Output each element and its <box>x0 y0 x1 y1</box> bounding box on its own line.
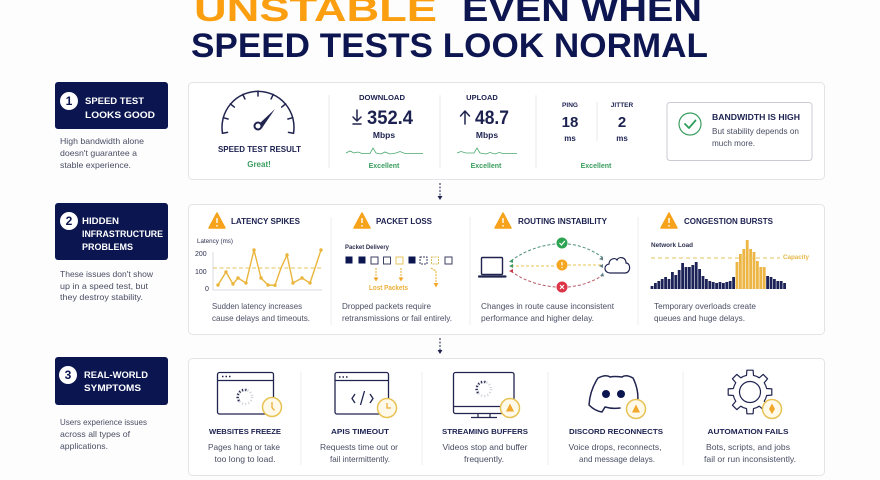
congestion bursts: Temporary overloads create <box>654 301 756 311</box>
ping metric: PING <box>562 102 578 109</box>
step 2 description: These issues don't show <box>60 269 154 279</box>
latency spikes: 200 <box>195 251 207 258</box>
congestion bursts: queues and huge delays. <box>654 313 745 323</box>
step 3 label: SYMPTOMS <box>84 383 141 394</box>
latency spikes: LATENCY SPIKES <box>231 217 301 226</box>
apis timeout: Requests time out or <box>320 442 398 452</box>
discord reconnects: and message delays. <box>579 454 655 464</box>
step 2 label <box>55 203 168 260</box>
step 1 description: High bandwidth alone <box>60 136 144 146</box>
step 2 label: INFRASTRUCTURE <box>82 229 163 240</box>
step 3 label: 3 <box>65 368 72 382</box>
download metric: Mbps <box>373 130 395 140</box>
latency spikes: 0 <box>205 286 209 293</box>
packet loss: PACKET LOSS <box>376 217 433 226</box>
discord reconnects <box>568 376 663 464</box>
step 1 description: doesn't guarantee a <box>60 148 137 158</box>
step 3 description: across all types of <box>60 429 131 439</box>
speed test result: Great! <box>247 160 271 169</box>
step 2 description: up in a speed test, but <box>60 281 149 291</box>
ping metric: ms <box>564 134 576 143</box>
title: SPEED TESTS LOOK NORMAL <box>191 27 708 65</box>
download metric <box>346 93 423 170</box>
packet loss: Dropped packets require <box>342 301 431 311</box>
step 1 description: stable experience. <box>60 160 131 170</box>
step 2 description: they destroy stability. <box>60 292 143 302</box>
ping and jitter rating: Excellent <box>581 163 612 170</box>
callout: bandwidth is high: BANDWIDTH IS HIGH <box>712 113 800 122</box>
callout: bandwidth is high: much more. <box>712 138 755 148</box>
step 1 label: LOOKS GOOD <box>85 110 155 121</box>
websites freeze: too long to load. <box>214 454 276 464</box>
websites freeze: WEBSITES FREEZE <box>209 427 281 436</box>
upload metric <box>457 93 517 170</box>
step 2 label: 2 <box>66 214 73 228</box>
panel: real-world symptoms <box>188 358 824 476</box>
download metric: 352.4 <box>367 108 413 129</box>
streaming buffers: Videos stop and buffer <box>442 442 528 452</box>
jitter metric <box>611 102 633 143</box>
discord reconnects: DISCORD RECONNECTS <box>569 427 663 436</box>
download metric: Excellent <box>369 163 400 170</box>
congestion bursts: CONGESTION BURSTS <box>684 217 774 226</box>
packet loss: Lost Packets <box>369 285 408 292</box>
automation fails: Bots, scripts, and jobs <box>706 442 790 452</box>
step 2 label: HIDDEN <box>82 216 119 227</box>
speed test result: SPEED TEST RESULT <box>218 144 302 154</box>
ping metric <box>562 102 578 143</box>
streaming buffers: frequently. <box>464 454 504 464</box>
callout: bandwidth is high: But stability depends on <box>712 126 799 136</box>
packet loss: retransmissions or fail entirely. <box>342 313 452 323</box>
upload metric: Mbps <box>476 130 498 140</box>
arrow: step 2 to step 3 <box>438 338 442 354</box>
callout: bandwidth is high <box>667 102 812 160</box>
step 3 label <box>55 357 168 405</box>
jitter metric: ms <box>616 134 628 143</box>
step 3 description: applications. <box>60 441 108 451</box>
title <box>191 0 708 65</box>
streaming buffers: STREAMING BUFFERS <box>442 427 528 436</box>
step 1 label: SPEED TEST <box>85 96 144 107</box>
jitter metric: JITTER <box>611 102 633 109</box>
latency spikes: 100 <box>195 269 207 276</box>
automation fails: AUTOMATION FAILS <box>708 427 788 436</box>
streaming buffers <box>442 372 528 464</box>
panel: speed test <box>188 82 824 180</box>
ping metric: 18 <box>562 114 578 131</box>
congestion bursts: Capacity <box>783 255 810 261</box>
packet loss: Packet Delivery <box>345 245 390 251</box>
step 2 label: PROBLEMS <box>82 242 133 253</box>
step 3 label: REAL-WORLD <box>84 370 148 381</box>
discord reconnects: Voice drops, reconnects, <box>568 442 662 452</box>
icon: speed gauge <box>222 91 294 133</box>
step 1 label <box>55 82 168 129</box>
routing instability: performance and higher delay. <box>481 313 594 323</box>
upload metric: 48.7 <box>475 108 509 129</box>
panel: hidden problems <box>188 204 824 334</box>
websites freeze <box>208 372 282 464</box>
arrow: step 1 to step 2 <box>438 183 442 200</box>
automation fails <box>704 370 796 464</box>
speed test result <box>218 144 302 169</box>
websites freeze: Pages hang or take <box>208 442 280 452</box>
automation fails: fail or run inconsistently. <box>704 454 796 464</box>
step 3 description: Users experience issues <box>60 417 147 427</box>
jitter metric: 2 <box>618 114 626 131</box>
step 1 description <box>60 136 144 170</box>
apis timeout: APIS TIMEOUT <box>331 427 389 436</box>
apis timeout: fail intermittently. <box>330 454 390 464</box>
latency spikes <box>195 213 322 323</box>
latency spikes: Sudden latency increases <box>212 301 302 311</box>
step 1 label: 1 <box>66 94 73 108</box>
upload metric: Excellent <box>471 163 502 170</box>
apis timeout <box>320 372 398 464</box>
packet loss <box>342 213 452 323</box>
latency spikes: cause delays and timeouts. <box>212 313 310 323</box>
step 3 description <box>60 417 147 451</box>
download metric: DOWNLOAD <box>359 93 406 102</box>
routing instability: Changes in route cause inconsistent <box>481 301 615 311</box>
congestion bursts <box>651 213 810 323</box>
latency spikes: Latency (ms) <box>197 239 233 245</box>
routing instability <box>479 213 630 323</box>
upload metric: UPLOAD <box>466 93 498 102</box>
routing instability: ROUTING INSTABILITY <box>518 217 608 226</box>
congestion bursts: Network Load <box>651 243 693 249</box>
step 2 description <box>60 269 154 302</box>
